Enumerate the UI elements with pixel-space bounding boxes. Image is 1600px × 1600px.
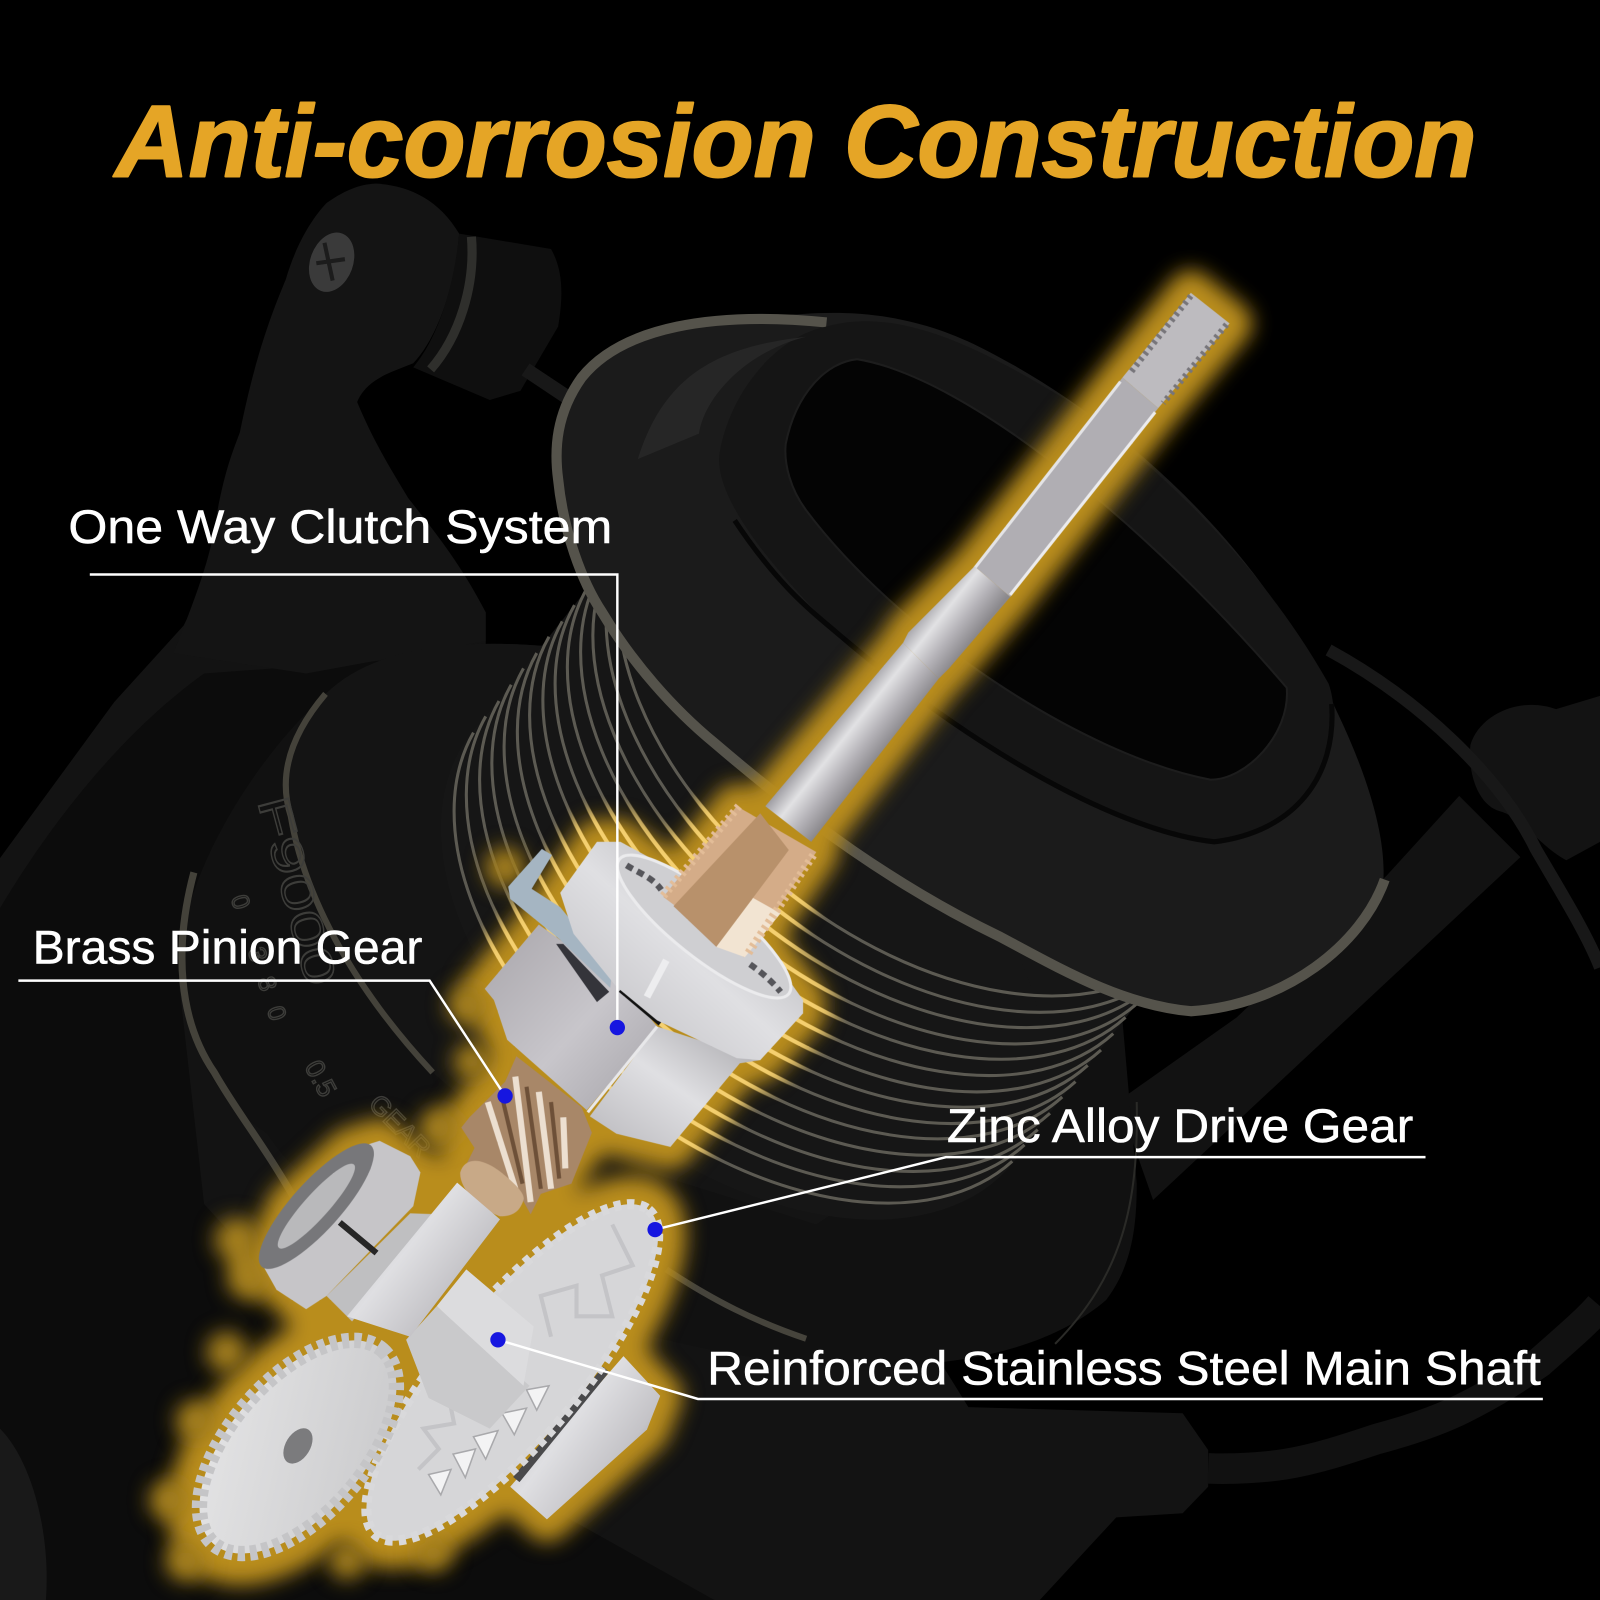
wire clip [508,849,612,988]
model text on flange [225,790,437,1163]
callout: zinc alloy drive gear: Zinc Alloy Drive Gear [947,1100,1413,1152]
flange rim outer [182,872,306,1219]
brass pinion gear [460,1056,592,1216]
pinion collar [460,1161,524,1216]
bearing face [600,835,808,1018]
callout: one way clutch system [68,501,625,1035]
line roller right [1470,696,1600,860]
clutch slot [556,944,609,1002]
callout: zinc alloy drive gear [647,1100,1426,1237]
callout: brass pinion gear [18,921,513,1104]
bail wire lower [1208,1306,1600,1469]
clutch cylinder left [485,924,657,1110]
flange inner face [286,612,1122,1224]
model text on flange: 0.380 [225,891,291,1024]
model text on flange: 0.5 [299,1055,343,1102]
foot left [0,1429,47,1600]
clutch seam [588,1027,657,1112]
bearing band [647,960,666,997]
bail wire left [526,369,571,400]
drive gear [324,1167,700,1578]
callout: reinforced stainless steel main shaft: Reinforced Stainless Steel Main Shaft [707,1343,1541,1395]
threaded tip [1122,293,1230,408]
brass thread section [663,806,816,957]
callout: one way clutch system: One Way Clutch System [68,501,612,553]
bail arm right [1118,796,1520,1200]
gear maze pattern [418,1224,633,1469]
bail wire right [1329,650,1600,967]
model text on flange: GEAR [363,1088,437,1163]
title: Anti-corrosion Construction [112,85,1477,199]
bevel teeth [429,1386,549,1495]
left gear [163,1306,433,1588]
arm screw [301,226,362,298]
lower spool flange [182,612,1137,1366]
flange rim inner [286,694,433,1072]
bearing outer ring [560,842,803,1060]
ridge shadow [735,520,1332,842]
small bearing [244,1129,439,1321]
bottom bearing [510,1356,660,1519]
main shaft [765,293,1230,842]
gear hole [277,1423,319,1469]
callout: brass pinion gear: Brass Pinion Gear [33,921,422,973]
bearing balls [627,865,781,992]
lower section [765,643,939,842]
flange inner ridge [719,321,1334,842]
flange highlight [638,337,806,459]
hub and lower shaft [347,1183,534,1429]
line roller [413,234,561,400]
upper flat [974,378,1158,597]
flange rim right [666,1269,806,1339]
upper arm [173,184,486,673]
clutch cylinder right [590,1027,760,1147]
flange lower edge [1055,1102,1137,1344]
mid step [903,566,1010,679]
model text on flange: F9000 [247,790,347,991]
frame inner panel [0,653,714,1600]
flange recess [785,359,1287,780]
gold glow behind parts [149,293,1230,1600]
reel body frame [0,571,1208,1600]
flange rim [557,319,1385,1011]
spool top flange [556,313,1385,1011]
one way clutch [485,806,816,1147]
callout: reinforced stainless steel main shaft [490,1332,1543,1399]
spool body with grooves [339,526,1177,1330]
